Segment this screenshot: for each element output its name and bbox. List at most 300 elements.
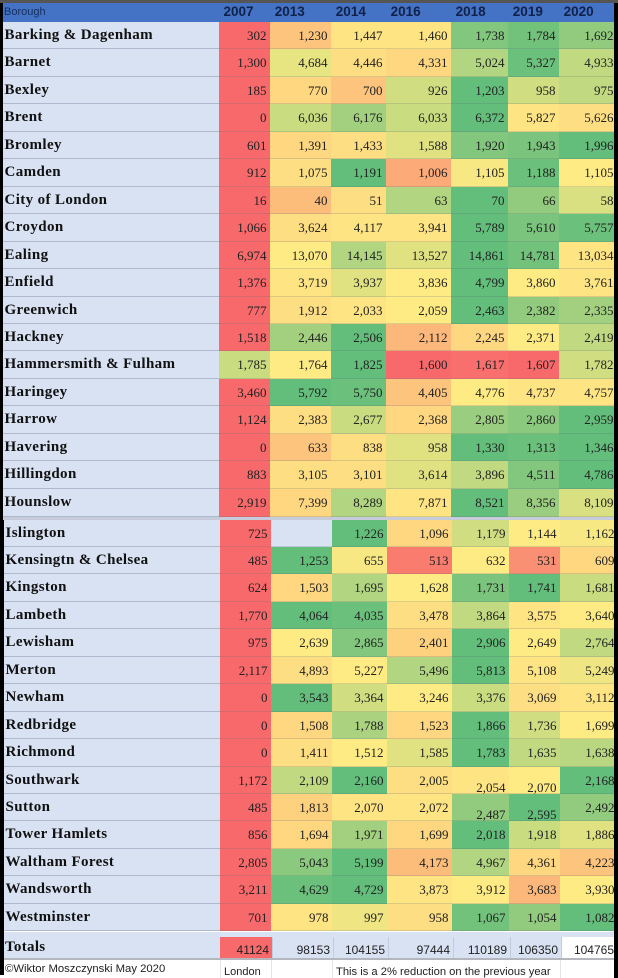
row: Harrow: 2,677 [353,412,382,427]
row: Harrow: 2,368 [418,412,448,427]
row: Sutton [4,794,614,822]
top dark edge [0,0,618,3]
row: Hillingdon: 4,786 [584,467,614,482]
row: Tower Hamlets [4,821,614,849]
row: Newham: 3,364 [354,690,384,705]
row: Redbridge: 0 [261,718,268,733]
totals row: 106350 [518,943,558,957]
totals row: 98153 [297,943,330,957]
row: Haringey: Haringey [4,384,68,400]
row: Bromley: 1,433 [353,138,382,153]
row: Greenwich: 2,463 [475,303,504,318]
row: Kensingtn & Chelsea: 632 [486,553,506,568]
row: Brent: 6,176 [353,110,382,125]
row: Hackney [3,324,614,351]
header row: 2020 [564,4,594,19]
row: Tower Hamlets: 2,018 [476,827,506,842]
row: Havering [3,434,614,461]
row: Ealing [3,242,614,269]
row: Sutton: 1,813 [299,800,328,815]
row: Camden: 1,105 [584,165,614,180]
row: Bexley: 1,203 [475,83,504,98]
row: Brent: 5,827 [526,110,556,125]
row: Hammersmith & Fulham: 1,764 [298,357,328,372]
row: Greenwich: 2,059 [418,303,448,318]
row: Lambeth: 3,575 [527,608,556,623]
row: Hillingdon: 883 [247,467,266,482]
row: Ealing: 6,974 [237,248,266,263]
footer: London label: London [224,966,261,978]
row: Enfield: 1,376 [237,275,266,290]
row: Hackney: 2,506 [353,330,382,345]
row: Hounslow: 8,356 [526,495,556,510]
row: Lewisham: 2,764 [585,635,614,650]
row: Richmond: 1,411 [300,745,328,760]
row: Merton: 2,117 [239,663,268,678]
row: Newham: 3,376 [476,690,506,705]
row: Wandsworth: 4,729 [354,882,384,897]
row: City of London: 66 [542,193,556,208]
header row: 2016 [391,4,421,19]
row: Haringey: 4,776 [475,385,504,400]
row: Bromley [3,132,614,159]
row: Islington: Islington [6,525,66,541]
row: Camden [3,159,614,187]
header row: 2018 [456,4,486,19]
row: Southwark: 2,160 [354,773,384,788]
row: Merton: 5,227 [354,663,384,678]
row: Kensingtn & Chelsea: Kensingtn & Chelsea [6,552,149,568]
row: Lewisham: 2,906 [476,635,506,650]
row: Bexley [3,77,614,104]
row: Bexley: 700 [363,83,382,98]
row: Merton [4,657,614,684]
row: Camden: 912 [247,165,266,180]
row: Haringey: 4,757 [584,385,614,400]
row: Westminster: 1,054 [527,910,556,925]
row: Newham [4,684,614,712]
row: Barking & Dagenham: 302 [247,28,266,43]
header row [0,3,618,22]
footer credit: ©Wiktor Moszczynski May 2020 [5,963,165,975]
row: Lewisham: 2,639 [299,635,328,650]
row: Hillingdon: 3,101 [353,467,382,482]
row: Southwark: 2,168 [585,773,614,788]
row: Enfield: 3,860 [526,275,556,290]
row: Barking & Dagenham: 1,692 [584,28,614,43]
row: Harrow: 2,959 [584,412,614,427]
row: Bexley: 770 [308,83,328,98]
row: Tower Hamlets: 1,694 [299,827,328,842]
totals row: 110189 [468,943,507,957]
row: Haringey: 4,405 [418,385,448,400]
row: City of London: 58 [600,193,614,208]
row: Havering: 1,346 [584,440,614,455]
row: City of London: 63 [434,193,448,208]
row: Hillingdon: Hillingdon [4,466,77,482]
row: Islington: 1,144 [527,526,556,541]
row: Enfield: 3,719 [298,275,328,290]
totals row: 104765 [574,943,614,957]
row: Westminster: 978 [309,910,328,925]
row: Havering: 633 [308,440,328,455]
row: Ealing: 13,034 [578,248,614,263]
row: Wandsworth: 3,912 [476,882,506,897]
row: Hammersmith & Fulham: 1,782 [584,357,614,372]
row: Enfield: 3,761 [584,275,614,290]
row: Tower Hamlets: 1,971 [354,827,384,842]
row: Bexley: 958 [536,83,556,98]
row: Lambeth: 4,064 [299,608,328,623]
row: Richmond: 1,635 [527,745,556,760]
row: Brent: 0 [260,110,266,125]
row: Sutton: 2,072 [419,800,448,815]
header row: 2014 [336,4,366,19]
row: Richmond: 0 [261,745,268,760]
row: Lambeth: 3,864 [476,608,506,623]
row: Croydon: 5,757 [584,220,614,235]
row: Merton: 5,249 [585,663,614,678]
row: Merton: 5,813 [476,663,506,678]
row: Lewisham: 975 [248,635,268,650]
row: Redbridge: 1,866 [476,718,506,733]
row: Camden: Camden [4,164,61,180]
row: Merton: 5,496 [419,663,448,678]
row: Sutton: 485 [248,800,268,815]
row: Hammersmith & Fulham: 1,600 [418,357,448,372]
row: Croydon: 3,941 [418,220,448,235]
row: Ealing: 14,861 [469,248,504,263]
row: Hackney: 2,419 [584,330,614,345]
header row: 2019 [513,4,543,19]
row: Ealing: 14,145 [347,248,382,263]
row: Islington: 725 [248,526,268,541]
row: Waltham Forest [4,849,614,876]
row: City of London [3,187,614,214]
row: Waltham Forest: 4,173 [419,855,448,870]
row: Richmond: 1,512 [354,745,384,760]
row: Hammersmith & Fulham: 1,617 [475,357,504,372]
row: Southwark [4,767,614,795]
row: Havering: 0 [260,440,266,455]
row: Hounslow: 7,399 [298,495,328,510]
row: Westminster: 958 [429,910,448,925]
row: Bromley: 1,996 [584,138,614,153]
row: Hillingdon: 4,511 [527,467,556,482]
row: Bexley: 185 [247,83,266,98]
row: Barnet: 4,684 [298,55,328,70]
row: Harrow [3,406,614,434]
row: Richmond: 1,585 [419,745,448,760]
row: Croydon: 4,117 [354,220,382,235]
row: Greenwich: Greenwich [4,302,78,318]
row: Camden: 1,188 [526,165,556,180]
row: Sutton: Sutton [6,799,50,815]
row: Newham: 3,069 [527,690,556,705]
row: Tower Hamlets: 856 [248,827,268,842]
row: Kensingtn & Chelsea: 1,253 [299,553,328,568]
row: Waltham Forest: 5,199 [354,855,384,870]
row: Hounslow: 8,521 [475,495,504,510]
row: Haringey: 3,460 [237,385,266,400]
row: Newham: 3,112 [586,690,614,705]
row: Barking & Dagenham: 1,784 [526,28,556,43]
row: Barnet: 1,300 [237,55,266,70]
row: Harrow: 2,860 [526,412,556,427]
row: Wandsworth: Wandsworth [6,881,92,897]
row: Hammersmith & Fulham: 1,825 [353,357,382,372]
row: Hammersmith & Fulham: 1,785 [237,357,266,372]
row: Croydon: 3,624 [298,220,328,235]
row: Greenwich: 2,335 [584,303,614,318]
row: Westminster: 1,082 [585,910,614,925]
row: Havering: 838 [363,440,382,455]
row: Barnet: 4,446 [353,55,382,70]
row: Enfield: 3,836 [418,275,448,290]
row: Merton: Merton [6,662,56,678]
row: Southwark: 2,054 [476,780,506,795]
row: Hackney: 2,371 [526,330,556,345]
row: Enfield [3,269,614,297]
row: Hounslow: 8,289 [353,495,382,510]
row: Bromley: 1,391 [298,138,328,153]
row: Harrow: 2,805 [475,412,504,427]
row: Kingston: 1,731 [476,580,506,595]
row: Havering: 958 [428,440,448,455]
row: Lewisham: Lewisham [6,634,74,650]
row: Hounslow: Hounslow [4,494,72,510]
header row: 2007 [224,4,254,19]
row: Barnet: 4,331 [418,55,448,70]
row: City of London: 40 [314,193,328,208]
row: Westminster [4,904,614,931]
row: Haringey: 5,792 [298,385,328,400]
row: Havering: Havering [4,439,68,455]
row: Kingston: 1,628 [419,580,448,595]
row: Redbridge: 1,523 [419,718,448,733]
row: Wandsworth: 4,629 [299,882,328,897]
row: Kingston: 1,741 [527,580,556,595]
row: Hammersmith & Fulham [3,351,614,379]
row: Richmond: 1,783 [476,745,506,760]
row: Havering: 1,330 [475,440,504,455]
row: Lewisham: 2,649 [527,635,556,650]
row: Hounslow [3,489,614,517]
row: Islington: 1,226 [354,526,384,541]
row: Waltham Forest: 5,043 [299,855,328,870]
row: Kingston: 1,695 [354,580,384,595]
footer note: This is a 2% reduction on the previous year [336,966,551,978]
row: Kensingtn & Chelsea: 609 [595,553,614,568]
row: Harrow: 2,383 [298,412,328,427]
row: Waltham Forest: Waltham Forest [6,854,114,870]
row: Waltham Forest: 4,967 [476,855,506,870]
row: Waltham Forest: 2,805 [238,855,268,870]
row: Camden: 1,105 [475,165,504,180]
row: Bromley: 1,943 [526,138,556,153]
row: Merton: 4,893 [299,663,328,678]
row: Haringey [3,379,614,406]
row: Islington: 1,179 [476,526,506,541]
row: Enfield: 3,937 [353,275,382,290]
row: Ealing: 14,781 [520,248,556,263]
row: Newham: 3,543 [299,690,328,705]
row: Redbridge [4,712,614,739]
row: Barnet [3,49,614,77]
row: Wandsworth: 3,683 [527,882,556,897]
row: City of London: 16 [254,193,266,208]
row: Croydon: 1,066 [237,220,266,235]
row: Lambeth: Lambeth [6,607,66,623]
row: Brent: 6,372 [475,110,504,125]
row: Hackney: 2,446 [298,330,328,345]
row: Croydon: Croydon [4,219,64,235]
row: Redbridge: 1,788 [354,718,384,733]
row: Greenwich: 1,912 [298,303,328,318]
row: Lambeth: 4,035 [354,608,384,623]
row: Barnet: 4,933 [584,55,614,70]
totals row: 104155 [345,943,385,957]
row: Hammersmith & Fulham: 1,607 [526,357,556,372]
row: Croydon: 5,610 [526,220,556,235]
row: Wandsworth: 3,211 [239,882,268,897]
row: Richmond: Richmond [6,744,75,760]
row: Newham: Newham [6,689,64,705]
row: Brent [3,104,614,132]
row: Harrow: Harrow [4,411,57,427]
row: Bexley: 926 [428,83,448,98]
row: Tower Hamlets: 1,699 [419,827,448,842]
row: Bromley: 601 [247,138,266,153]
row: Barking & Dagenham: Barking & Dagenham [4,27,153,43]
row: Southwark: 2,109 [299,773,328,788]
row: Ealing: 13,527 [412,248,448,263]
row: Lambeth: 3,640 [585,608,614,623]
row: Sutton: 2,595 [527,807,556,822]
row: Greenwich: 2,382 [526,303,556,318]
row: Wandsworth: 3,873 [419,882,448,897]
row: Redbridge: 1,508 [299,718,328,733]
row: Camden: 1,191 [353,165,382,180]
row: Islington: 1,096 [419,526,448,541]
row: Southwark: 2,070 [527,780,556,795]
row: Tower Hamlets: 1,918 [527,827,556,842]
row: Kensingtn & Chelsea [4,547,614,574]
row: Croydon: 5,789 [475,220,504,235]
row: Bromley: Bromley [4,137,62,153]
row: Barking & Dagenham: 1,230 [298,28,328,43]
row: Hillingdon: 3,896 [475,467,504,482]
row: Lambeth [4,602,614,629]
row: Lambeth: 1,770 [238,608,268,623]
row: Westminster: 701 [248,910,268,925]
row: Greenwich: 2,033 [353,303,382,318]
row: Kingston: Kingston [6,579,67,595]
row: Harrow: 1,124 [237,412,266,427]
row: Kensingtn & Chelsea: 513 [429,553,448,568]
row: Camden: 1,006 [418,165,448,180]
row: Hackney: Hackney [4,329,64,345]
row: Southwark: 2,005 [419,773,448,788]
row: Barnet: Barnet [4,54,51,70]
row: Hounslow: 2,919 [237,495,266,510]
row: Bromley: 1,920 [475,138,504,153]
row: Lambeth: 3,478 [419,608,448,623]
row: Hackney: 2,112 [419,330,448,345]
row: Tower Hamlets: Tower Hamlets [6,826,108,842]
row: Kingston: 1,681 [585,580,614,595]
row: Richmond: 1,638 [585,745,614,760]
totals row: 41124 [237,943,269,957]
row: Redbridge: 1,736 [527,718,556,733]
row: Sutton: 2,487 [476,807,506,822]
row: Bexley: 975 [594,83,614,98]
row: Wandsworth: 3,930 [585,882,614,897]
row: Sutton: 2,492 [585,800,614,815]
row: Hackney: 1,518 [237,330,266,345]
row: Barking & Dagenham: 1,738 [475,28,504,43]
row: Ealing: 13,070 [292,248,328,263]
row: Barnet: 5,327 [526,55,556,70]
row: Bexley: Bexley [4,82,49,98]
header label: Borough: Borough [4,6,46,18]
row: Havering: 1,313 [526,440,556,455]
row: City of London: 51 [370,193,382,208]
row: Bromley: 1,588 [418,138,448,153]
row: Kingston: 1,503 [299,580,328,595]
row: Tower Hamlets: 1,886 [585,827,614,842]
row: Brent: Brent [4,109,43,125]
row: Kensingtn & Chelsea: 485 [248,553,268,568]
row: Redbridge: Redbridge [6,717,76,733]
row: Brent: 6,033 [418,110,448,125]
row: Croydon [3,214,614,242]
row: Lewisham: 2,865 [354,635,384,650]
row: Hammersmith & Fulham: Hammersmith & Fulham [4,356,175,372]
row: Barking & Dagenham: 1,447 [353,28,382,43]
row: Brent: 5,626 [584,110,614,125]
row: Westminster: Westminster [6,909,90,925]
row: Enfield: 4,799 [475,275,504,290]
row: Barnet: 5,024 [475,55,504,70]
row: Islington: 1,162 [585,526,614,541]
row: Redbridge: 1,699 [585,718,614,733]
row: Kensingtn & Chelsea: 531 [537,553,556,568]
totals row: 97444 [417,943,450,957]
row: City of London: City of London [4,192,107,208]
header row: 2013 [275,4,305,19]
row: Hackney: 2,245 [475,330,504,345]
row: Brent: 6,036 [298,110,328,125]
row: Westminster: 1,067 [476,910,506,925]
row: Waltham Forest: 4,361 [527,855,556,870]
row: Camden: 1,075 [298,165,328,180]
row: Newham: 3,246 [419,690,448,705]
row: Wandsworth [4,876,614,904]
row: Barking & Dagenham [3,22,614,49]
row: Hillingdon: 3,105 [298,467,328,482]
row: Haringey: 4,737 [526,385,556,400]
row: Greenwich [3,297,614,324]
row: Westminster: 997 [364,910,384,925]
row: Lewisham [4,629,614,657]
row: Enfield: Enfield [4,274,54,290]
row: Southwark: 1,172 [238,773,268,788]
row: Hillingdon: 3,614 [418,467,448,482]
row: Barking & Dagenham: 1,460 [418,28,448,43]
row: Richmond [4,739,614,767]
row: Merton: 5,108 [527,663,556,678]
